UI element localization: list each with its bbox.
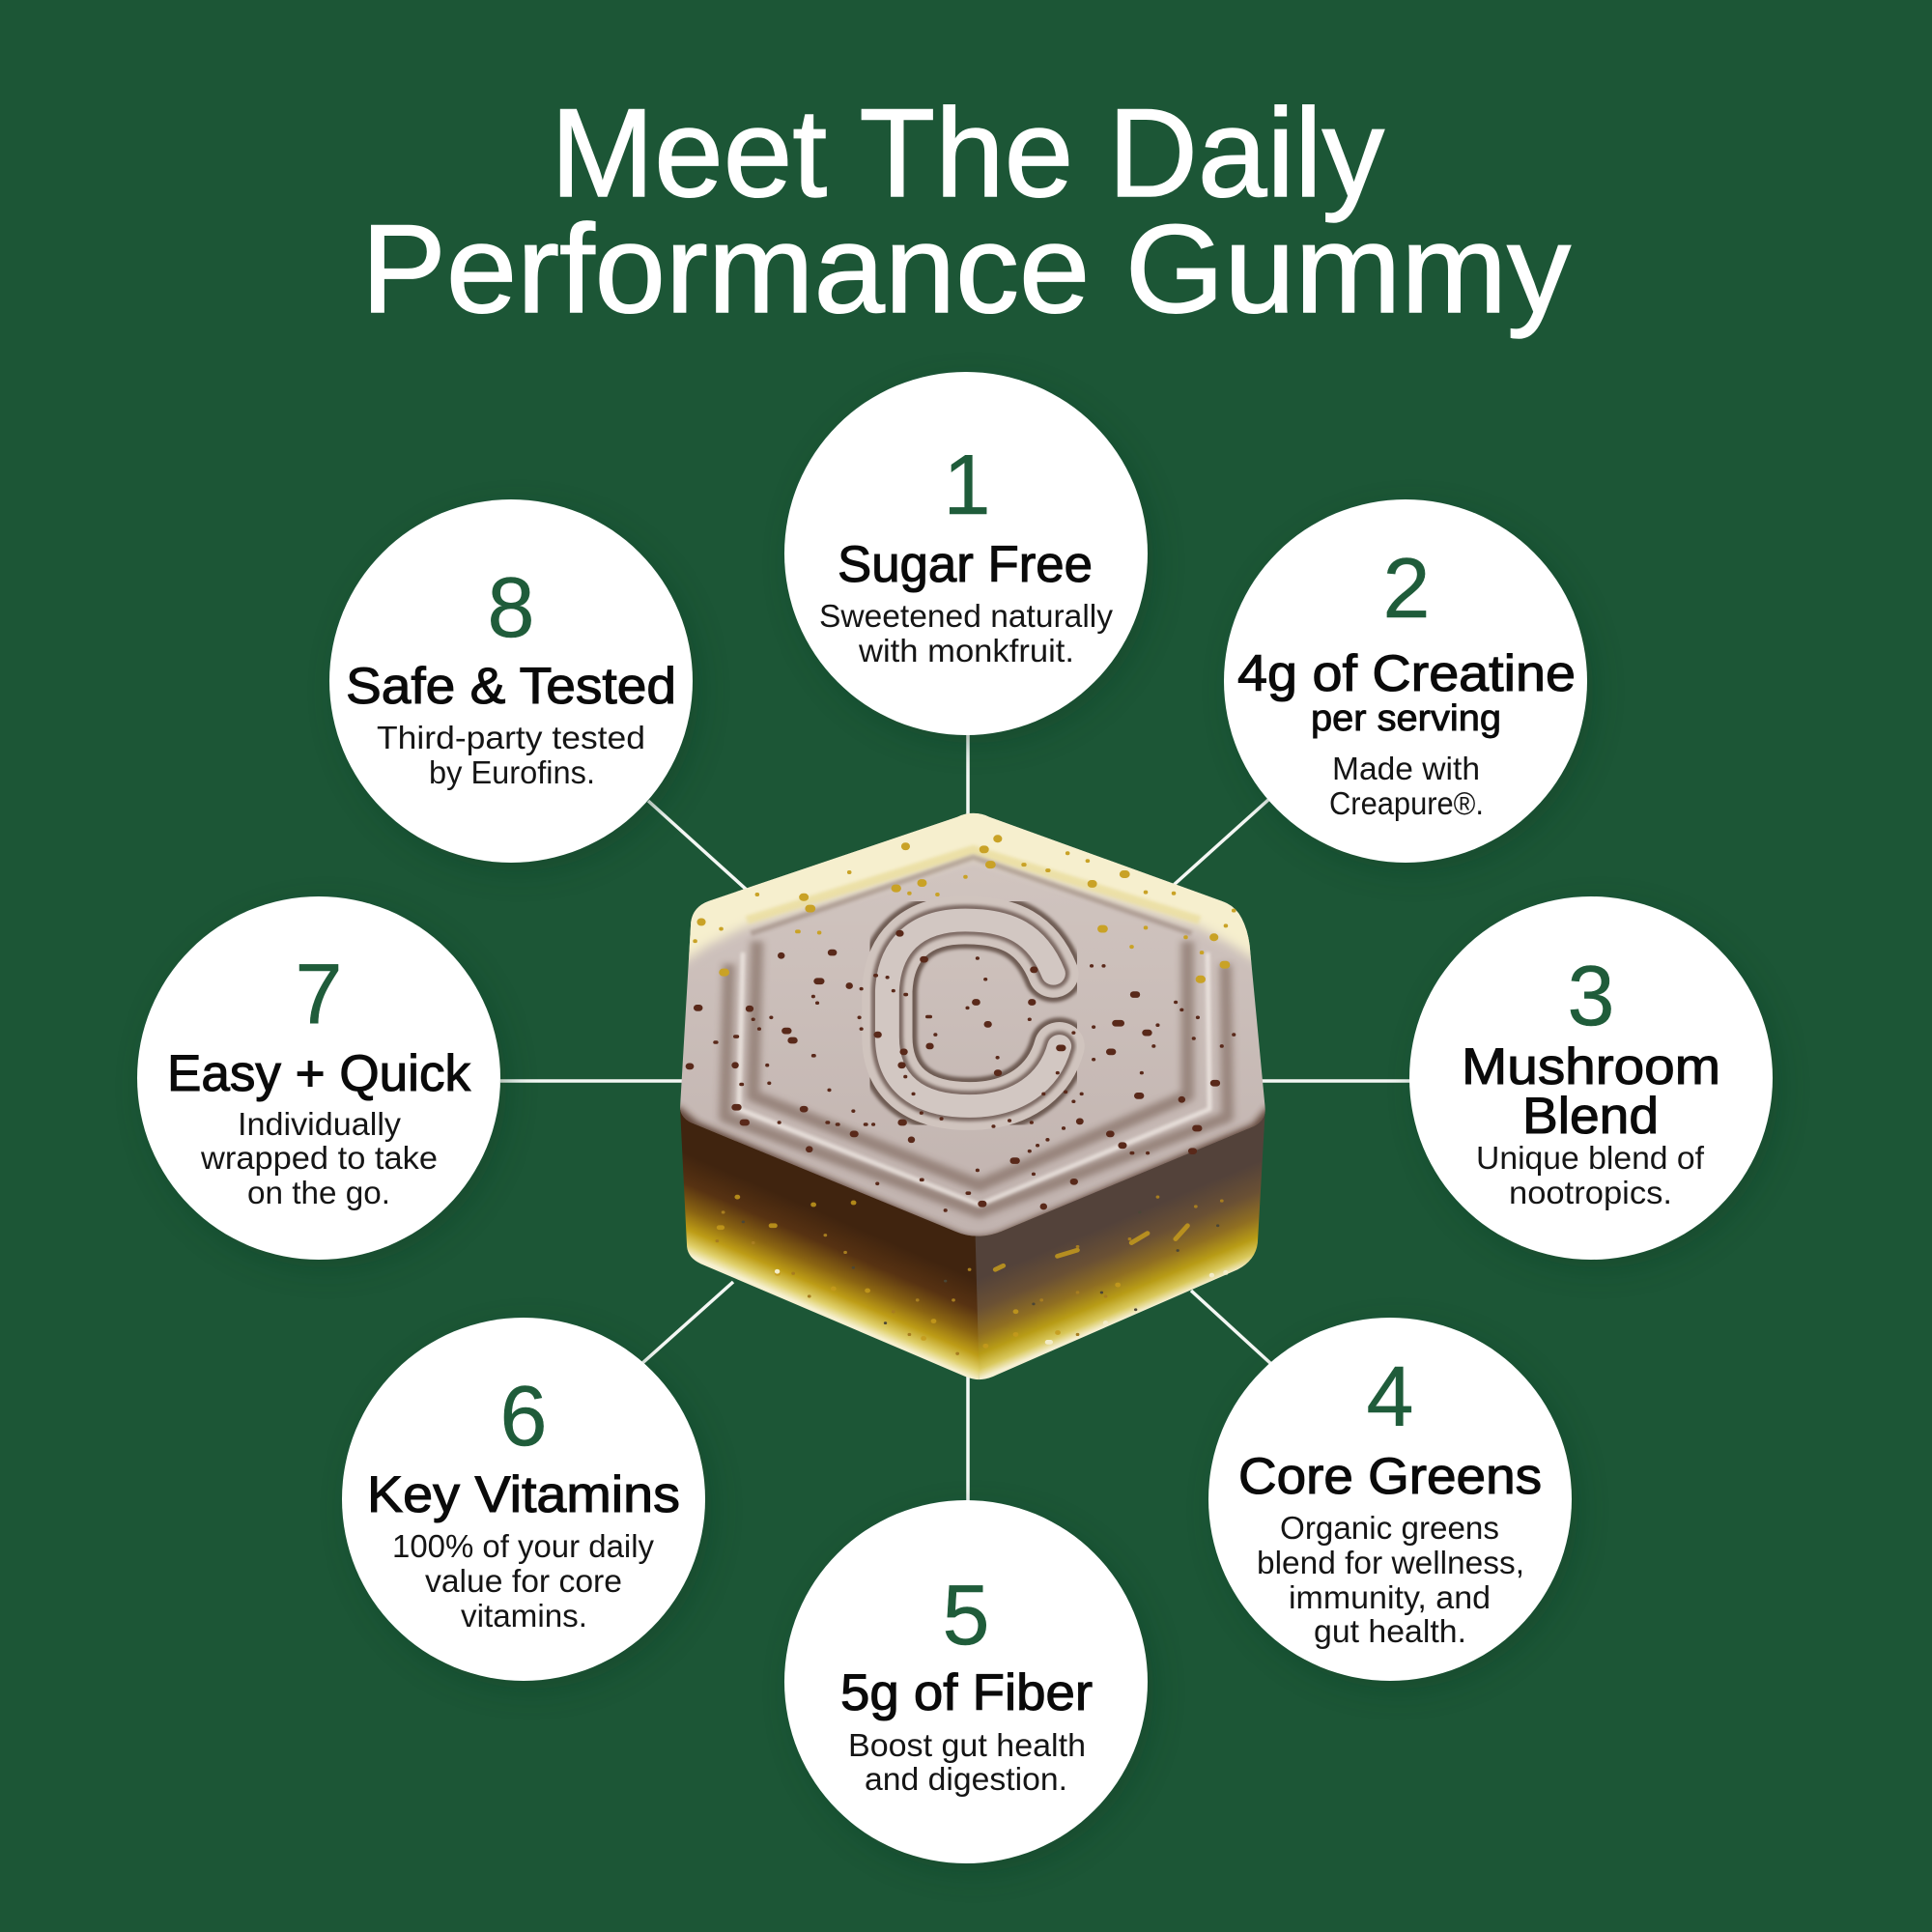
description: Third-party tested bbox=[377, 720, 645, 755]
number 8: 8 bbox=[488, 559, 534, 655]
description: immunity, and bbox=[1289, 1579, 1491, 1615]
heading: Blend bbox=[1522, 1088, 1659, 1145]
description: Individually bbox=[238, 1106, 402, 1142]
heading: 5g of Fiber bbox=[840, 1664, 1093, 1721]
description bbox=[1329, 751, 1484, 821]
number 5: 5 bbox=[943, 1567, 989, 1662]
circle 4: Core Greens bbox=[1208, 1318, 1572, 1681]
gummy bbox=[680, 813, 1265, 1379]
circle 8: Safe & Tested bbox=[329, 499, 693, 863]
edge shading bbox=[673, 1111, 1273, 1244]
circle shadows bbox=[147, 384, 1778, 1871]
number 3: 3 bbox=[1568, 948, 1614, 1043]
circle 5: Fiber bbox=[784, 1500, 1148, 1863]
heading: Safe & Tested bbox=[346, 658, 676, 715]
circle 3: Mushroom Blend bbox=[1409, 896, 1773, 1260]
description bbox=[848, 1727, 1086, 1797]
description bbox=[1257, 1510, 1524, 1649]
heading: Sugar Free bbox=[838, 536, 1093, 593]
number 2: 2 bbox=[1383, 540, 1430, 636]
description: and digestion. bbox=[865, 1761, 1067, 1797]
description: Boost gut health bbox=[848, 1727, 1086, 1763]
description: gut health. bbox=[1314, 1613, 1466, 1649]
gummy right side bbox=[976, 1109, 1265, 1379]
description: wrapped to take bbox=[200, 1140, 438, 1176]
description: Made with bbox=[1332, 751, 1480, 786]
gummy specks bbox=[689, 838, 1234, 1353]
description: Creapure®. bbox=[1329, 785, 1484, 821]
embossed hexagon bbox=[724, 857, 1228, 1212]
embossed letter C bbox=[887, 920, 1060, 1106]
heading: Core Greens bbox=[1238, 1448, 1542, 1505]
subheading: per serving bbox=[1311, 698, 1501, 739]
gummy top face bbox=[680, 813, 1265, 1236]
description bbox=[1476, 1140, 1705, 1210]
description: blend for wellness, bbox=[1257, 1545, 1524, 1580]
description: 100% of your daily bbox=[392, 1528, 654, 1564]
heading: Easy + Quick bbox=[167, 1045, 470, 1102]
circle 2: Creatine bbox=[1224, 499, 1587, 863]
number 4: 4 bbox=[1367, 1349, 1413, 1444]
heading: 4g of Creatine bbox=[1237, 645, 1576, 702]
circle 6: Key Vitamins bbox=[342, 1318, 705, 1681]
description: nootropics. bbox=[1509, 1175, 1672, 1210]
description: Sweetened naturally bbox=[819, 598, 1114, 634]
heading bbox=[1462, 1038, 1720, 1145]
number 6: 6 bbox=[500, 1368, 547, 1463]
heading: Mushroom bbox=[1462, 1038, 1720, 1095]
gummy left side bbox=[680, 1109, 983, 1379]
circle 7: Easy + Quick bbox=[137, 896, 500, 1260]
description bbox=[392, 1528, 654, 1634]
gummy cream rim bbox=[688, 813, 1252, 966]
description: Unique blend of bbox=[1476, 1140, 1705, 1176]
description: Organic greens bbox=[1280, 1510, 1499, 1546]
description bbox=[377, 720, 645, 790]
circle 1: Sugar Free bbox=[784, 372, 1148, 735]
title: Meet The Daily bbox=[551, 82, 1384, 223]
description: value for core bbox=[425, 1563, 622, 1599]
description: with monkfruit. bbox=[858, 633, 1074, 668]
title bbox=[361, 82, 1571, 339]
number 1: 1 bbox=[944, 437, 990, 532]
number 7: 7 bbox=[296, 946, 342, 1041]
heading: Key Vitamins bbox=[367, 1466, 680, 1523]
description bbox=[200, 1106, 438, 1210]
description: by Eurofins. bbox=[429, 754, 595, 790]
connector lines bbox=[500, 729, 1420, 1507]
description: vitamins. bbox=[461, 1598, 587, 1634]
title: Performance Gummy bbox=[361, 198, 1571, 339]
description bbox=[819, 598, 1114, 668]
description: on the go. bbox=[247, 1175, 390, 1210]
